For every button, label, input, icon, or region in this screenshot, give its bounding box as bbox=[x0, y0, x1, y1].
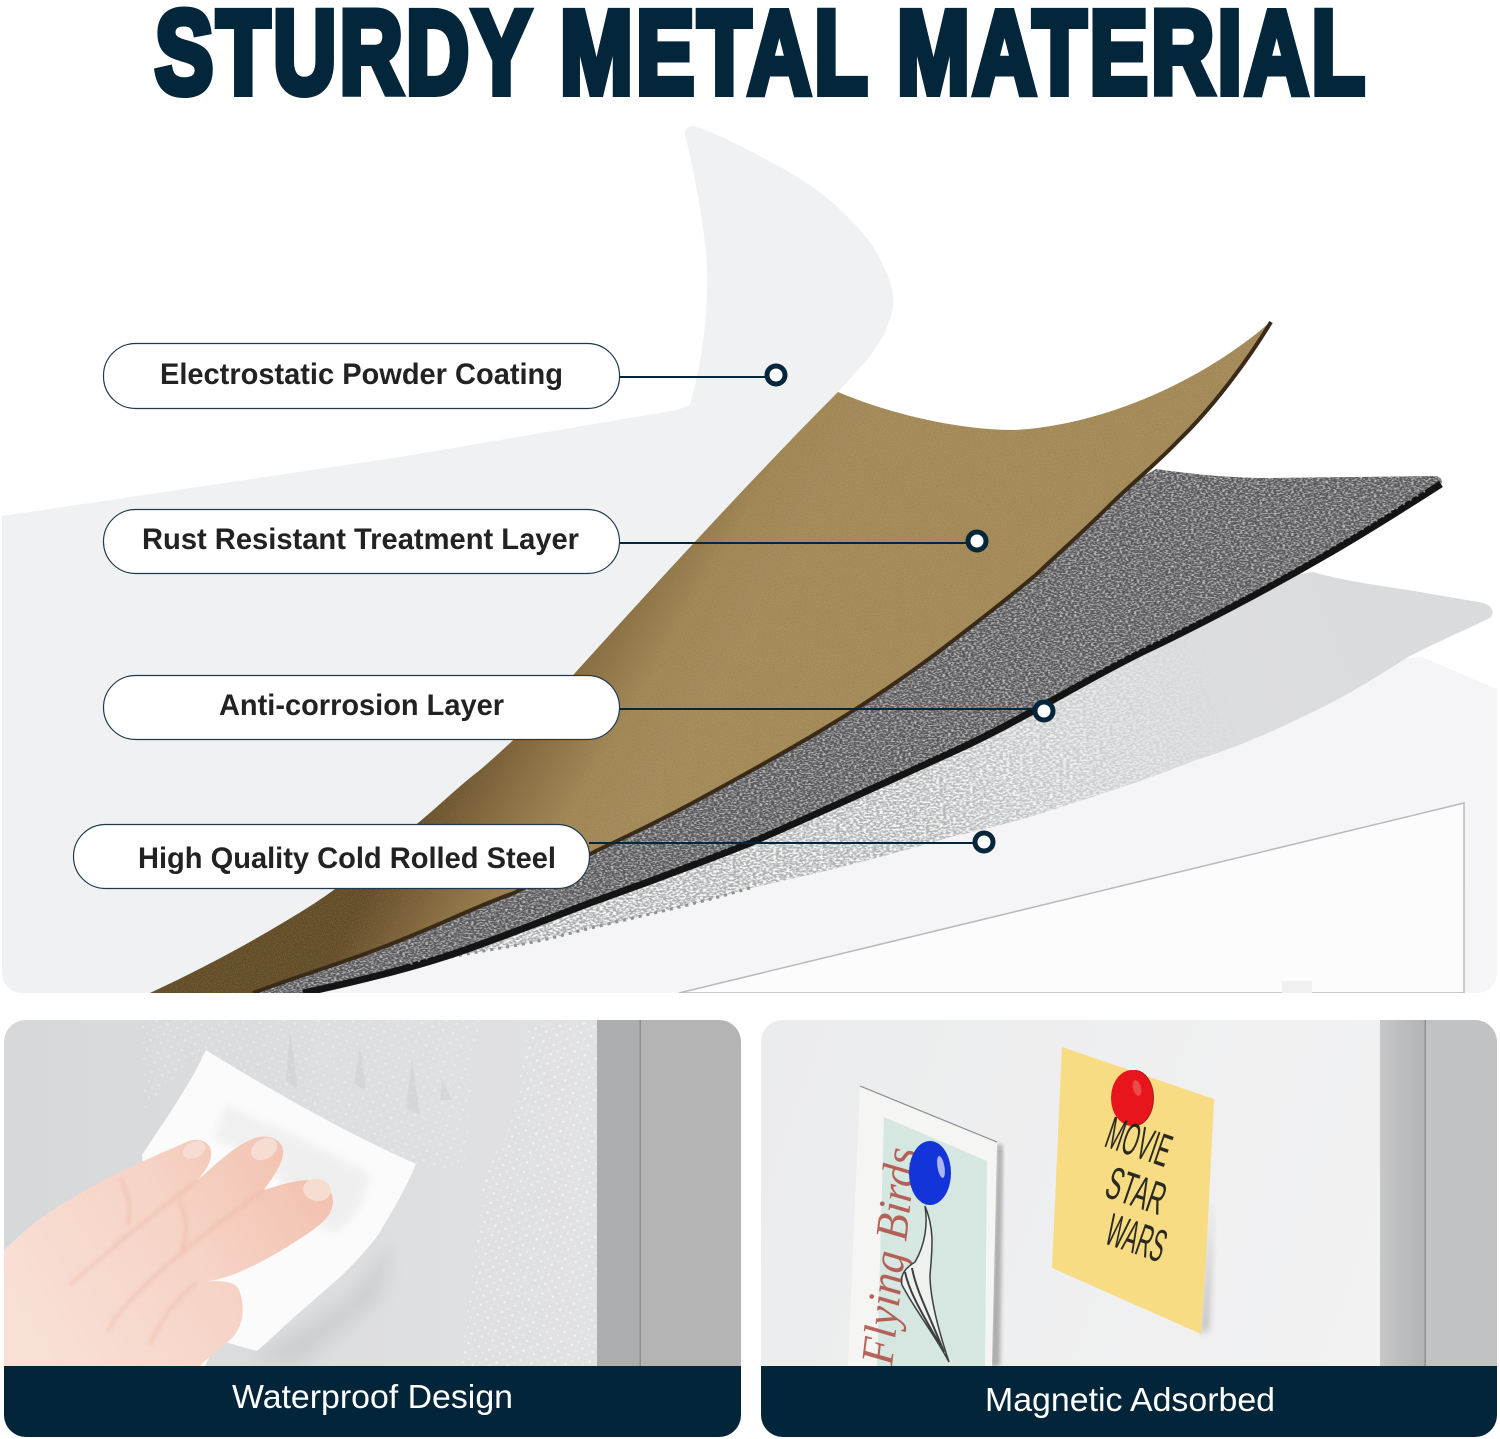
door inner highlight bbox=[1282, 981, 1312, 993]
wall background bbox=[761, 1020, 1380, 1366]
marker bbox=[975, 833, 993, 851]
cabinet door bbox=[679, 803, 1464, 993]
note: MOVIE: MOVIE bbox=[1100, 1107, 1178, 1177]
towel fold shading bbox=[220, 1110, 368, 1228]
caption: Magnetic Adsorbed bbox=[985, 1381, 1275, 1418]
wall background bbox=[4, 1020, 597, 1437]
caption bar bbox=[761, 1366, 1497, 1437]
cabinet side bbox=[641, 1020, 741, 1366]
callout: Rust Resistant Treatment Layer bbox=[104, 510, 986, 574]
silver toothed edge bbox=[451, 886, 750, 958]
marker bbox=[1035, 702, 1053, 720]
water droplets, right bbox=[462, 1023, 598, 1366]
towel bbox=[142, 1050, 416, 1366]
postcard script lettering: Flying Birds bbox=[851, 1145, 927, 1368]
cabinet side strip bbox=[1380, 1020, 1425, 1366]
pill bbox=[104, 510, 620, 574]
postcard bbox=[848, 1087, 997, 1366]
bird drawing bbox=[902, 1206, 949, 1362]
silver cold rolled steel sheet bbox=[472, 572, 1493, 953]
strip divider bbox=[640, 1020, 641, 1366]
leader line bbox=[619, 542, 970, 544]
leader line bbox=[589, 842, 978, 844]
panel: magnetic adsorbed bbox=[761, 1020, 1497, 1437]
electrostatic powder coating sheet bbox=[2, 126, 893, 993]
brown layer dark edge bbox=[253, 322, 1271, 993]
postcard print area bbox=[877, 1117, 987, 1366]
postcard top shadow line bbox=[860, 1086, 997, 1142]
hand bbox=[4, 1137, 333, 1366]
cabinet body, right side bbox=[280, 657, 1499, 993]
fingernails bbox=[182, 1138, 331, 1201]
pill bbox=[104, 344, 620, 408]
finger creases bbox=[70, 1178, 264, 1345]
label: Rust Resistant Treatment Layer bbox=[142, 523, 580, 556]
water droplets, upper bbox=[140, 1020, 480, 1170]
anti-corrosion black edge bbox=[303, 484, 1441, 993]
caption: Waterproof Design bbox=[232, 1378, 513, 1415]
leader line bbox=[619, 708, 1038, 710]
sticky note shadow bbox=[1201, 1105, 1215, 1334]
pill bbox=[74, 824, 590, 888]
marker bbox=[968, 532, 986, 550]
cabinet side bbox=[1426, 1020, 1497, 1366]
panel: layered metal illustration bbox=[2, 126, 1499, 993]
anti-corrosion grey layer bbox=[250, 469, 1442, 993]
note: WARS: WARS bbox=[1100, 1204, 1173, 1272]
blue magnet bbox=[909, 1141, 951, 1205]
callout: Electrostatic Powder Coating bbox=[104, 344, 785, 408]
postcard shadow bbox=[990, 1143, 1003, 1366]
rust resistant brown layer bbox=[150, 323, 1269, 993]
red magnet bbox=[1111, 1070, 1154, 1126]
leader line bbox=[619, 376, 770, 378]
pill bbox=[104, 676, 620, 740]
strip divider bbox=[1424, 1020, 1426, 1366]
silver embossed texture bbox=[462, 652, 1190, 955]
label: Anti-corrosion Layer bbox=[219, 689, 505, 722]
label: Electrostatic Powder Coating bbox=[160, 358, 563, 391]
marker bbox=[767, 366, 785, 384]
callout: High Quality Cold Rolled Steel bbox=[74, 824, 993, 888]
label: High Quality Cold Rolled Steel bbox=[138, 842, 556, 875]
water streaks bbox=[286, 1030, 452, 1115]
black edge teeth bbox=[405, 491, 1425, 966]
caption bar bbox=[4, 1366, 741, 1437]
cabinet side strip bbox=[597, 1020, 640, 1366]
callout: Anti-corrosion Layer bbox=[104, 676, 1053, 740]
sticky note bbox=[1052, 1047, 1214, 1334]
towel shadow bbox=[268, 1262, 386, 1363]
panel: waterproof design bbox=[4, 1020, 741, 1437]
note: STAR: STAR bbox=[1100, 1157, 1173, 1225]
